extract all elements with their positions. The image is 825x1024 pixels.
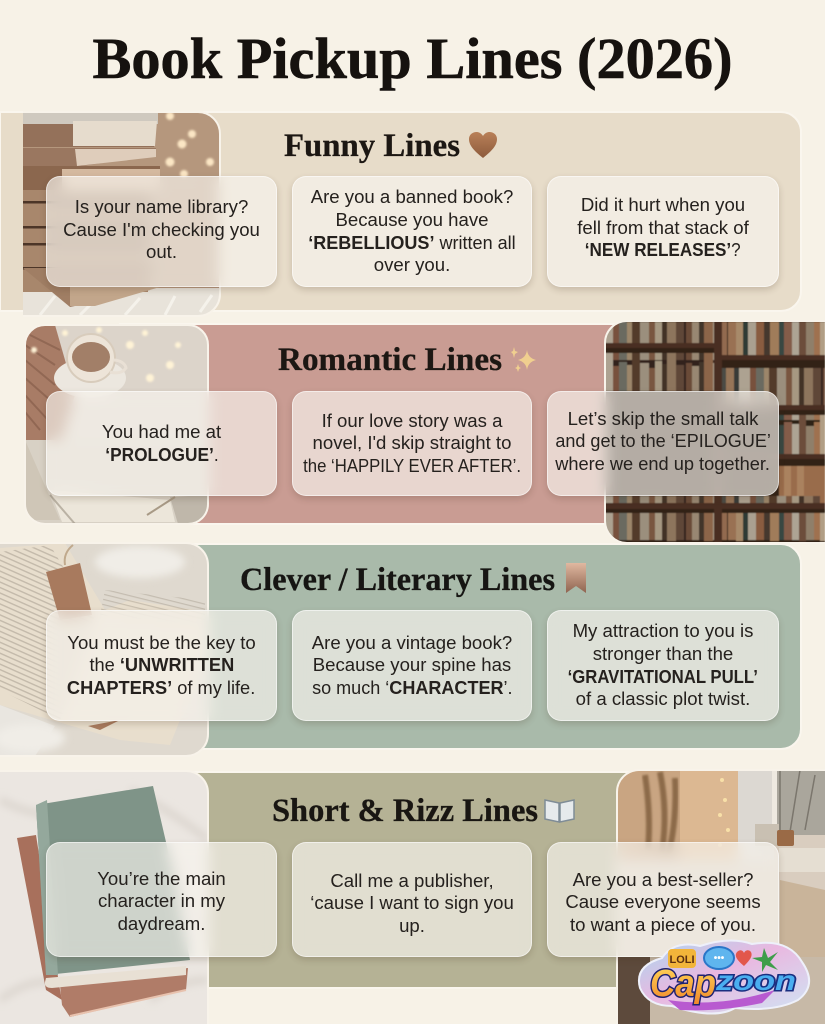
card: library line <box>46 176 277 287</box>
card: main character line: daydream. <box>118 913 205 934</box>
card: library line: Is your name library? <box>75 196 248 217</box>
card: epilogue line: and get to the ‘EPILOGUE’ <box>555 430 771 451</box>
heading: clever literary lines: Clever / Literary Lines <box>240 562 555 598</box>
card: banned book line: ‘REBELLIOUS’ written all <box>308 232 516 252</box>
card: banned book line: Because you have <box>336 209 488 230</box>
card: publisher line: ‘cause I want to sign you <box>310 892 514 913</box>
card: best-seller line: Cause everyone seems <box>565 891 761 912</box>
card: unwritten chapters line <box>46 610 277 721</box>
card: vintage book line <box>292 610 532 721</box>
card: unwritten chapters line: the ‘UNWRITTEN <box>89 654 234 675</box>
card: main character line <box>46 842 277 957</box>
card: publisher line: Call me a publisher, <box>330 870 494 891</box>
watermark logo: Capzoon: Cap <box>650 963 716 1005</box>
card: new releases line <box>547 176 779 287</box>
panel: short and rizz lines band <box>120 772 640 988</box>
heading: short and rizz lines: Short & Rizz Lines <box>272 793 538 829</box>
card: epilogue line: Let’s skip the small talk <box>568 408 758 429</box>
card: vintage book line: Are you a vintage book? <box>312 632 512 653</box>
photo border: open book <box>0 543 208 756</box>
card: publisher line <box>292 842 532 957</box>
card: love story line: novel, I'd skip straight to <box>313 432 511 453</box>
card: banned book line: Are you a banned book? <box>311 186 513 207</box>
card: unwritten chapters line: CHAPTERS’ of my life. <box>67 677 256 698</box>
card: epilogue line: where we end up together. <box>556 453 770 474</box>
card: library line: out. <box>146 241 177 262</box>
card: best-seller line: Are you a best-seller? <box>573 869 753 890</box>
card: gravitational pull line: ‘GRAVITATIONAL PULL’ <box>568 666 758 686</box>
photo border: window nook <box>617 770 825 1024</box>
card: best-seller line: to want a piece of you. <box>570 914 756 935</box>
heading: funny lines: Funny Lines <box>284 128 460 164</box>
card: banned book line <box>292 176 532 287</box>
photo: stacked books with bokeh <box>23 112 220 316</box>
card: love story line <box>292 391 532 496</box>
card: banned book line: over you. <box>374 254 450 275</box>
panel: romantic lines band <box>120 324 640 524</box>
card: new releases line: ‘NEW RELEASES’? <box>585 239 741 260</box>
title: Book Pickup Lines (2026) <box>92 26 732 91</box>
card: gravitational pull line: stronger than the <box>593 643 733 664</box>
card: library line: Cause I'm checking you <box>63 219 260 240</box>
photo: bookshelf <box>605 321 825 543</box>
card: love story line: If our love story was a <box>322 410 502 431</box>
photo: coffee cup, lights and open book <box>25 325 208 524</box>
card: gravitational pull line <box>547 610 779 721</box>
panel: clever lines band <box>120 544 801 749</box>
card: best-seller line <box>547 842 779 957</box>
card: gravitational pull line: My attraction to you is <box>573 620 753 641</box>
photo: open book with kraft bookmark <box>0 543 208 756</box>
photo border: coffee cup <box>25 325 208 524</box>
photo: cosy window nook <box>617 770 825 1024</box>
photo border: green books <box>0 771 208 1024</box>
card: love story line: the ‘HAPPILY EVER AFTER’. <box>303 455 521 476</box>
card: new releases line: fell from that stack of <box>577 217 749 238</box>
card: gravitational pull line: of a classic plot twist. <box>576 688 750 709</box>
icon: brown heart <box>469 132 497 158</box>
icon: bookmark <box>566 563 586 593</box>
card: prologue line <box>46 391 277 496</box>
watermark logo: Capzoon: ••• <box>714 953 725 964</box>
card: publisher line: up. <box>399 915 425 936</box>
card: unwritten chapters line: You must be the key to <box>67 632 256 653</box>
photo border: bookshelf <box>605 321 825 543</box>
photo: green and pink books on linen <box>0 771 208 1024</box>
card: prologue line: ‘PROLOGUE’. <box>105 444 218 464</box>
icon: sparkles <box>511 347 536 372</box>
icon: open book <box>545 800 574 822</box>
card: epilogue line <box>547 391 779 496</box>
photo border: stacked books <box>23 112 220 316</box>
card: prologue line: You had me at <box>102 421 221 442</box>
watermark logo: Capzoon: LOLI <box>669 954 695 966</box>
watermark logo: Capzoon: zoon <box>715 965 796 996</box>
card: main character line: You’re the main <box>97 868 226 889</box>
panel: funny lines band <box>0 112 801 311</box>
card: main character line: character in my <box>98 890 225 911</box>
card: vintage book line: Because your spine has <box>313 654 511 675</box>
heading: romantic lines: Romantic Lines <box>278 342 502 378</box>
card: new releases line: Did it hurt when you <box>581 194 745 215</box>
card: vintage book line: so much ‘CHARACTER’. <box>312 677 512 698</box>
